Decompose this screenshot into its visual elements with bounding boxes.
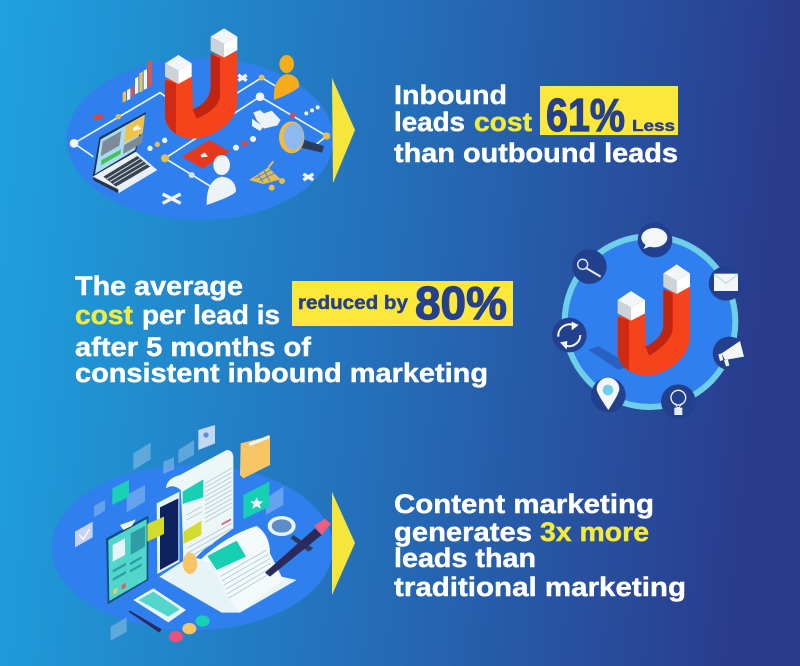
icon: laptop: [93, 112, 157, 193]
magnifier: [268, 516, 313, 552]
text block: average cost per lead: after 5 months of: [75, 332, 312, 362]
arrow: section one: [332, 78, 355, 183]
phone: [133, 588, 186, 622]
icon: thumbs up: [252, 110, 281, 131]
illustration: content marketing documents: [52, 425, 333, 642]
icon: speech bubble: [638, 223, 672, 257]
paper curl: [183, 526, 283, 613]
chat tile: [112, 480, 129, 505]
magnet shadow: [588, 346, 630, 370]
callout: 61% less: Less: [632, 118, 675, 135]
magnet: [618, 264, 690, 375]
check tile: [75, 522, 93, 547]
callout: 61% less: [540, 86, 678, 141]
text block: inbound leads cost: leads: [394, 107, 465, 137]
text block: average cost per lead: consistent inbound marketing: [75, 358, 488, 388]
illustration: lead magnet on blue disc: [67, 28, 333, 220]
pencil: [265, 519, 331, 577]
yellow-green note: [147, 517, 164, 542]
text block: content marketing: Content marketing: [394, 489, 654, 519]
illustration: magnet in icon ring: [552, 223, 746, 419]
laptop base: [159, 557, 297, 613]
callout: 61% less: 61%: [546, 89, 625, 141]
icon: megaphone: [713, 337, 746, 370]
laptop screen: [157, 492, 179, 574]
callout: reduced by 80%: 80%: [415, 277, 507, 329]
arrow: section three: [332, 492, 355, 595]
icon: envelope: [709, 266, 743, 301]
text block: content marketing: generates: [394, 517, 532, 547]
magnet body: [165, 28, 237, 139]
text block: inbound leads cost: [394, 80, 678, 168]
icon: search: [572, 249, 607, 284]
icon: shopping cart: [249, 161, 285, 191]
connector dots: [147, 105, 320, 151]
text block: average cost per lead: cost: [75, 300, 133, 330]
icon: orange person: [274, 55, 299, 100]
text block: average cost per lead: The average: [75, 271, 243, 301]
small pencil: [128, 611, 162, 633]
star tile: [243, 482, 269, 519]
paper scroll: [166, 450, 233, 570]
clipboard: [106, 516, 148, 604]
text block: content marketing: [394, 489, 686, 602]
icon: white person: [207, 155, 236, 205]
text block: inbound leads cost: cost: [474, 107, 532, 137]
profile tile: [198, 425, 215, 450]
text block: content marketing: leads than: [394, 543, 536, 573]
icon: location pin: [591, 378, 626, 412]
text block: content marketing: traditional marketing: [394, 572, 686, 602]
callout: reduced by 80%: [292, 277, 513, 329]
video tile: [182, 140, 230, 168]
icon: magnifying glass: [279, 121, 324, 153]
text block: average cost per lead: per lead is: [142, 300, 280, 330]
text block: average cost per lead: [75, 271, 488, 388]
icon: light bulb: [661, 384, 696, 419]
icon: bar chart: [123, 60, 152, 103]
icon: flag: [93, 114, 104, 120]
text block: inbound leads cost: Inbound: [394, 80, 507, 110]
cross marks: [163, 75, 313, 203]
floating tiles: [94, 440, 283, 641]
callout: reduced by 80%: reduced by: [298, 293, 408, 314]
media buttons: [169, 615, 210, 642]
icon: refresh: [552, 318, 587, 352]
text block: content marketing: 3x more: [540, 517, 649, 547]
text block: inbound leads cost: than outbound leads: [394, 138, 678, 168]
folder: [240, 435, 270, 478]
